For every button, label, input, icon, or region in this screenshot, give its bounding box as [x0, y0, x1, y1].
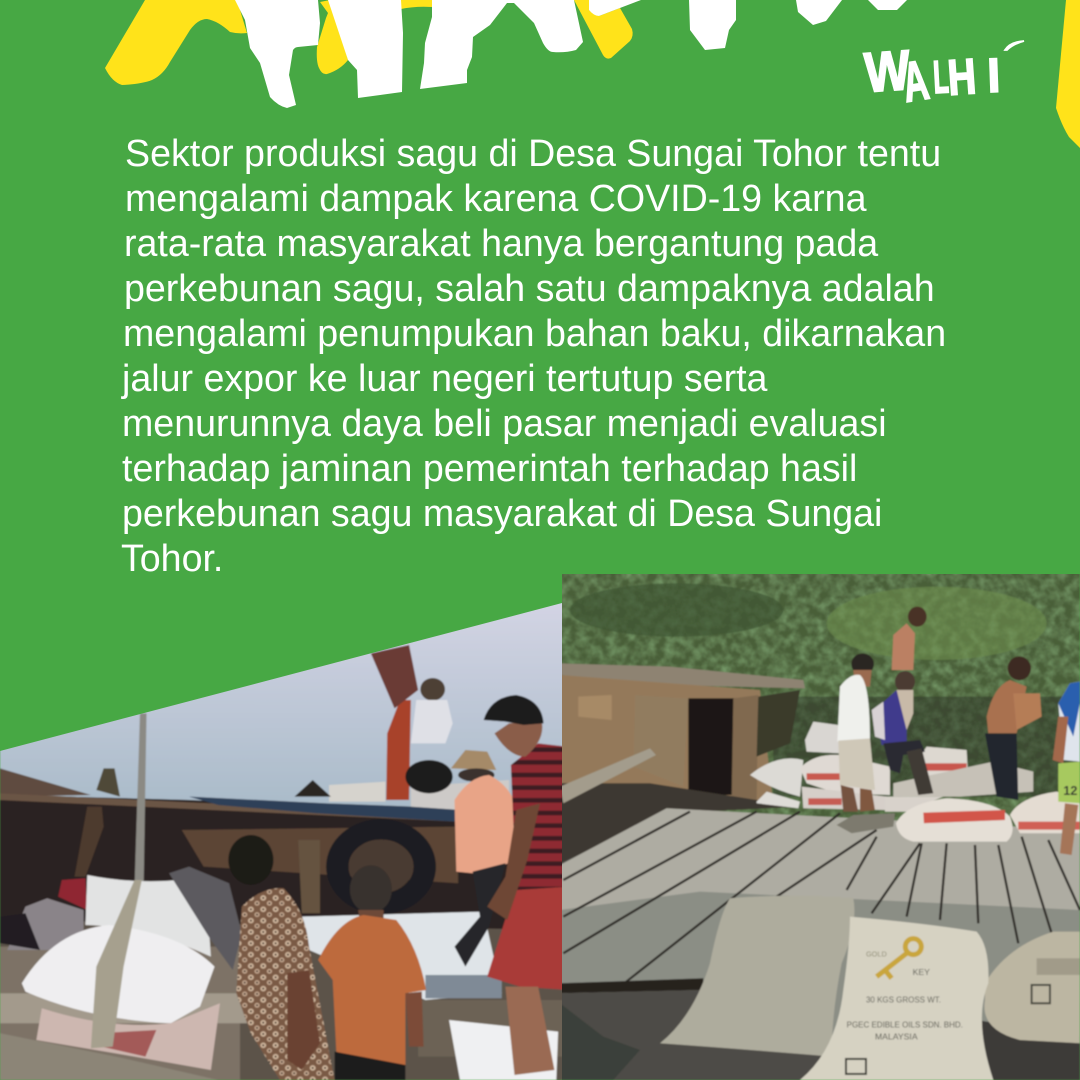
- worker in pink shirt: [451, 750, 518, 967]
- white brush shape: silhouette 6: [796, 0, 842, 25]
- foliage background: [560, 570, 1080, 847]
- deck base: [0, 900, 567, 1080]
- hanging rope: [298, 840, 320, 913]
- wooden cabin: [560, 663, 805, 803]
- body text paragraph: rata-rata masyarakat hanya bergantung pada: [124, 222, 878, 264]
- body text paragraph: perkebunan sagu, salah satu dampaknya adalah: [124, 267, 935, 309]
- white brush shape: silhouette 3: [420, 0, 583, 89]
- body text paragraph: jalur expor ke luar negeri tertutup serta: [122, 357, 767, 399]
- crane: [371, 645, 453, 800]
- boat hull: [0, 768, 567, 930]
- sack: gold key printed: 30 KGS GROSS WT.: [866, 995, 941, 1004]
- body text paragraph: Tohor.: [121, 537, 223, 579]
- WALHI logo: H: [946, 47, 978, 106]
- sack: gold key printed: GOLD: [866, 950, 887, 959]
- seated boy: [872, 671, 933, 795]
- rope pole: [135, 713, 147, 887]
- sky: [0, 600, 567, 813]
- white brush shape: silhouette 1: [235, 0, 320, 108]
- body text paragraph: [121, 132, 946, 579]
- boy in orange shirt: [318, 865, 426, 1080]
- sack: gold key printed: PGEC EDIBLE OILS SDN. BHD.: [847, 1020, 963, 1029]
- dark lower cabin wall: [560, 783, 800, 863]
- yellow brush shape: right edge: [1056, 0, 1080, 148]
- yellow brush shape: centre right: [574, 0, 633, 59]
- yellow brush shape: left: [105, 0, 247, 85]
- printed sack: upper: [85, 875, 211, 957]
- man in blue and green: 12: [1063, 784, 1077, 798]
- WALHI logo: [863, 40, 1024, 114]
- fishing net: [560, 1003, 640, 1080]
- WALHI logo: A: [898, 48, 933, 114]
- deck planks: [0, 947, 240, 1080]
- railing log: [560, 748, 656, 803]
- worker in striped shirt: [484, 695, 567, 1075]
- photo: workers loading sacks onto boat: [0, 600, 567, 1080]
- sack: lower red print: [36, 1003, 220, 1070]
- WALHI logo: I: [986, 49, 1001, 102]
- worker in batik shirt: [228, 835, 335, 1080]
- white sack: large: [22, 925, 215, 1023]
- decorative top shapes: [105, 0, 1080, 148]
- sling strap: [91, 880, 142, 1048]
- white brush shape: silhouette 5: [689, 0, 736, 50]
- WALHI logo: L: [932, 50, 950, 103]
- body text paragraph: perkebunan sagu masyarakat di Desa Sungai: [122, 492, 882, 534]
- body text paragraph: mengalami dampak karena COVID-19 karna: [125, 177, 866, 219]
- stacked sacks: [750, 722, 1080, 833]
- yellow brush shape: centre stripe: [401, 0, 432, 9]
- man standing at back: [892, 607, 927, 670]
- shirtless man right: [985, 656, 1042, 800]
- man in blue and green: [1053, 682, 1080, 855]
- body text paragraph: menurunnya daya beli pasar menjadi evaluasi: [122, 402, 887, 444]
- sack: plain burlap: [660, 896, 854, 1057]
- white brush shape: silhouette 4: [589, 0, 641, 16]
- central sacks: [302, 912, 502, 1000]
- key icon: [877, 939, 921, 978]
- WALHI logo: W: [863, 40, 913, 105]
- tyre: [337, 829, 425, 904]
- sack: gold key printed: KEY: [913, 967, 930, 977]
- photo base: [562, 851, 822, 1076]
- body text paragraph: mengalami penumpukan bahan baku, dikarnakan: [123, 312, 946, 354]
- yellow brush shape: middle: [317, 0, 348, 74]
- worker bent over: [0, 878, 87, 950]
- deck: [560, 808, 1080, 1080]
- body text paragraph: Sektor produksi sagu di Desa Sungai Tohor tentu: [125, 132, 941, 174]
- photo: sacks on wooden deck: [560, 570, 1080, 1080]
- white brush shape: silhouette 7: [868, 0, 907, 10]
- sack: gold key printed: [800, 917, 993, 1080]
- flat folded sack: [837, 813, 895, 833]
- sack: right foreground: [984, 932, 1080, 1043]
- grey seated figure: [169, 867, 242, 970]
- front plank: [0, 1033, 218, 1080]
- large sack with red band: [896, 798, 1013, 842]
- sack: gold key printed: MALAYSIA: [875, 1031, 918, 1041]
- white brush shape: silhouette 2: [328, 0, 403, 98]
- sack: bottom right: [449, 1020, 558, 1080]
- man in white shirt: [837, 653, 875, 812]
- body text paragraph: terhadap jaminan pemerintah terhadap hasil: [122, 447, 857, 489]
